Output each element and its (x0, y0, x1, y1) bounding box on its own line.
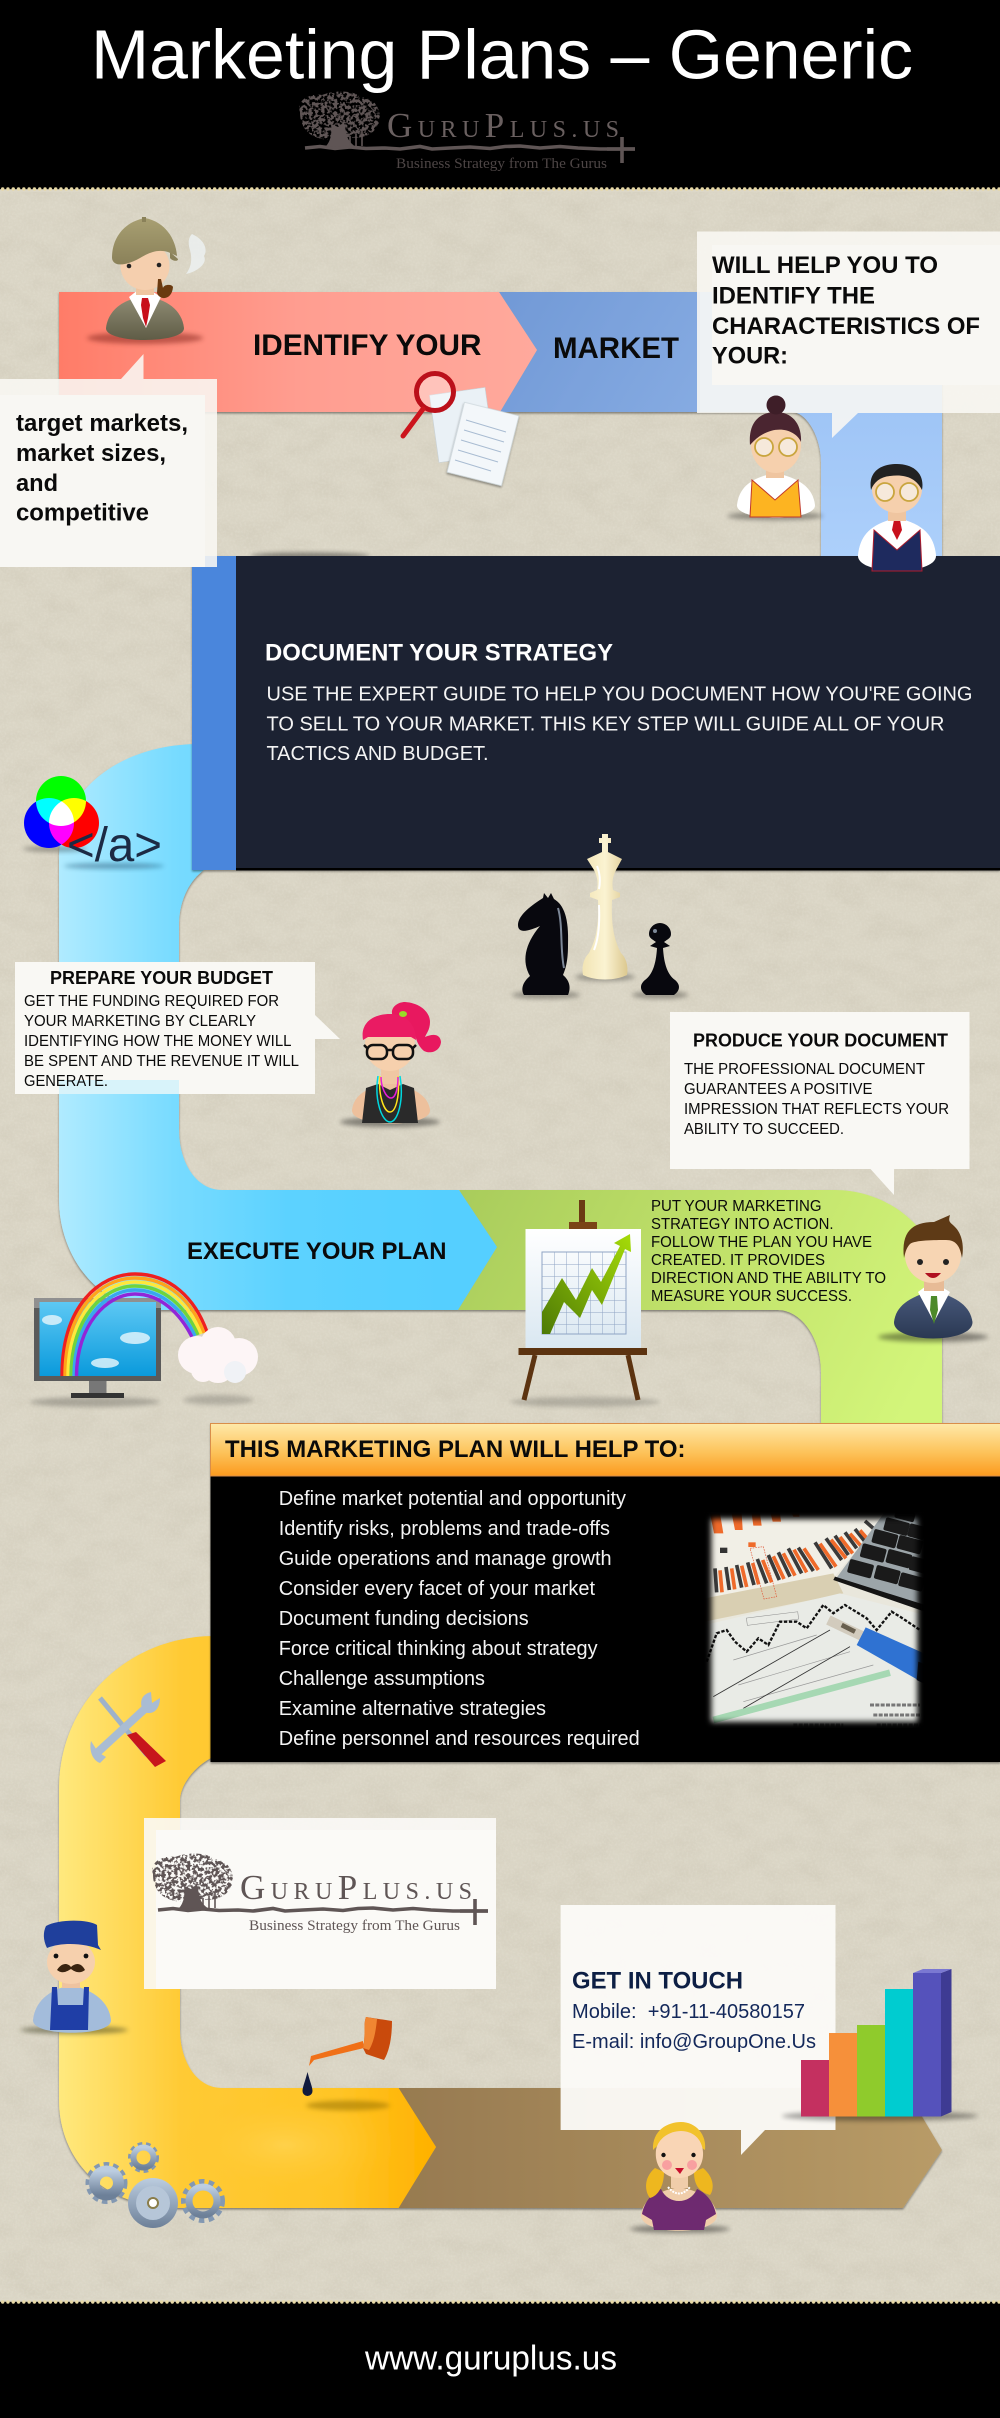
callout: produce your document: ABILITY TO SUCCEED. (684, 1121, 844, 1138)
knight (518, 893, 570, 995)
callout: target markets: market sizes, (16, 440, 166, 467)
benefits list: Document funding decisions (279, 1608, 529, 1630)
icon: wrench and screwdriver (90, 1692, 166, 1767)
pawn (641, 923, 679, 995)
logo panel: Business Strategy from The Gurus (249, 1918, 460, 1934)
text: put your marketing strategy: DIRECTION AND THE ABILITY TO (651, 1270, 886, 1287)
body text: USE THE EXPERT GUIDE TO HELP YOU DOCUMENT HOW YOU'RE GOING (266, 684, 972, 706)
benefits list: Force critical thinking about strategy (279, 1638, 598, 1660)
icon: monitor with rainbow and cloud (30, 1274, 258, 1407)
benefits list: Define market potential and opportunity (279, 1488, 626, 1510)
icon: code tag: </a> (67, 819, 162, 872)
text: put your marketing strategy: PUT YOUR MARKETING (651, 1198, 822, 1215)
icon: mechanic with moustache (20, 1921, 128, 2034)
icon: detective with pipe (87, 217, 206, 344)
icon: girl with pink hair (340, 1002, 441, 1127)
callout: produce your document: PRODUCE YOUR DOCUMENT (693, 1031, 948, 1051)
body text: TACTICS AND BUDGET. (266, 743, 488, 765)
callout: prepare your budget: GENERATE. (24, 1073, 108, 1090)
heading: DOCUMENT YOUR STRATEGY (265, 640, 613, 666)
icon: easel with growth chart (510, 1200, 660, 1407)
callout: target markets: and (16, 470, 58, 497)
benefits list: Guide operations and manage growth (279, 1548, 612, 1570)
photo: financial charts, calculator and pen (706, 1514, 922, 1726)
callout: prepare your budget: BE SPENT AND THE REVENUE IT WILL (24, 1053, 299, 1070)
heading: market: MARKET (553, 332, 679, 365)
footer band (0, 2299, 1000, 2418)
green arrow segment (458, 1190, 942, 1423)
callout: target markets: target markets, (16, 410, 188, 437)
callout: will help you to identify (697, 232, 1000, 438)
red arrow segment (59, 292, 537, 412)
benefits list: Identify risks, problems and trade-offs (279, 1518, 610, 1540)
text: put your marketing strategy: MEASURE YOUR SUCCESS. (651, 1288, 852, 1305)
icon: colour circles (23, 776, 99, 852)
callout: will help you to identify: CHARACTERISTICS OF (712, 313, 980, 340)
step 1 band: identify your market (59, 292, 942, 557)
benefits list (279, 1488, 640, 1750)
header logo (299, 91, 635, 172)
callout: produce your document (670, 1012, 970, 1195)
body text: TO SELL TO YOUR MARKET. THIS KEY STEP WILL GUIDE ALL OF YOUR (266, 714, 944, 736)
heading: execute your plan: EXECUTE YOUR PLAN (187, 1238, 446, 1265)
logo panel: GURUPLUS.US (240, 1868, 472, 1907)
heading: THIS MARKETING PLAN WILL HELP TO: (225, 1436, 686, 1463)
benefits list: Define personnel and resources required (279, 1728, 640, 1750)
text: put your marketing strategy: CREATED. IT PROVIDES (651, 1252, 825, 1269)
bar chart icon (782, 1969, 978, 2121)
icon: magnifier and papers (403, 374, 519, 486)
panel: document your strategy (192, 552, 1000, 870)
callout: get in touch: E-mail: info@GroupOne.Us (572, 2031, 816, 2053)
callout: will help you to identify: WILL HELP YOU TO (712, 252, 938, 279)
pale blue riser (700, 292, 942, 557)
callout: prepare your budget (15, 962, 340, 1094)
callout: produce your document: THE PROFESSIONAL DOCUMENT (684, 1061, 925, 1078)
logo panel (144, 1818, 496, 1989)
title: Marketing Plans – Generic (91, 16, 913, 94)
cloud (178, 1327, 258, 1383)
callout: produce your document: IMPRESSION THAT REFLECTS YOUR (684, 1101, 949, 1118)
callout: will help you to identify: YOUR: (712, 342, 788, 370)
body text (266, 684, 972, 765)
icon: woman with glasses (727, 396, 823, 520)
icon: smiling man in suit (878, 1215, 988, 1342)
callout: get in touch: Mobile: +91-11-40580157 (572, 2001, 805, 2023)
icon: gears (90, 2146, 221, 2228)
text: put your marketing strategy (651, 1198, 886, 1305)
callout: produce your document: GUARANTEES A POSITIVE (684, 1081, 872, 1098)
benefits list: Consider every facet of your market (279, 1578, 595, 1600)
icon: oil can with drop (302, 2017, 392, 2110)
benefits list: Examine alternative strategies (279, 1698, 546, 1720)
callout: get in touch: GET IN TOUCH (572, 1967, 743, 1994)
text: put your marketing strategy: FOLLOW THE PLAN YOU HAVE (651, 1234, 872, 1251)
icon: man with sweater vest (858, 464, 936, 571)
sky blue path: execute your plan (59, 744, 942, 1423)
king (583, 834, 627, 980)
benefits list: Challenge assumptions (279, 1668, 485, 1690)
website url: www.guruplus.us (364, 2340, 617, 2378)
panel: this marketing plan will help to (210, 1423, 1000, 1762)
heading: identify your: IDENTIFY YOUR (253, 329, 482, 362)
orange heading bar (210, 1424, 1000, 1476)
blue arrow segment (499, 292, 700, 412)
callout: prepare your budget: GET THE FUNDING REQUIRED FOR (24, 993, 279, 1010)
callout: target markets: competitive (16, 500, 149, 526)
callout: prepare your budget: PREPARE YOUR BUDGET (50, 968, 273, 988)
callout: target markets (0, 354, 217, 567)
header logo: Business Strategy from The Gurus (396, 156, 607, 172)
icon: chess pieces (512, 834, 688, 999)
callout: get in touch (561, 1905, 836, 2155)
tan arrow segment (398, 2088, 942, 2208)
callout: prepare your budget: IDENTIFYING HOW THE MONEY WILL (24, 1033, 292, 1050)
callout: prepare your budget: YOUR MARKETING BY CLEARLY (24, 1013, 256, 1030)
header logo: GURUPLUS.US (387, 106, 619, 145)
icon: blonde woman (630, 2122, 730, 2233)
yellow and tan path: bottom (59, 1636, 942, 2208)
yellow arrow segment (59, 1636, 436, 2208)
callout: will help you to identify: IDENTIFY THE (712, 282, 875, 310)
text: put your marketing strategy: STRATEGY INTO ACTION. (651, 1216, 834, 1233)
sky arrow segment (59, 744, 497, 1310)
header band (0, 0, 1000, 192)
